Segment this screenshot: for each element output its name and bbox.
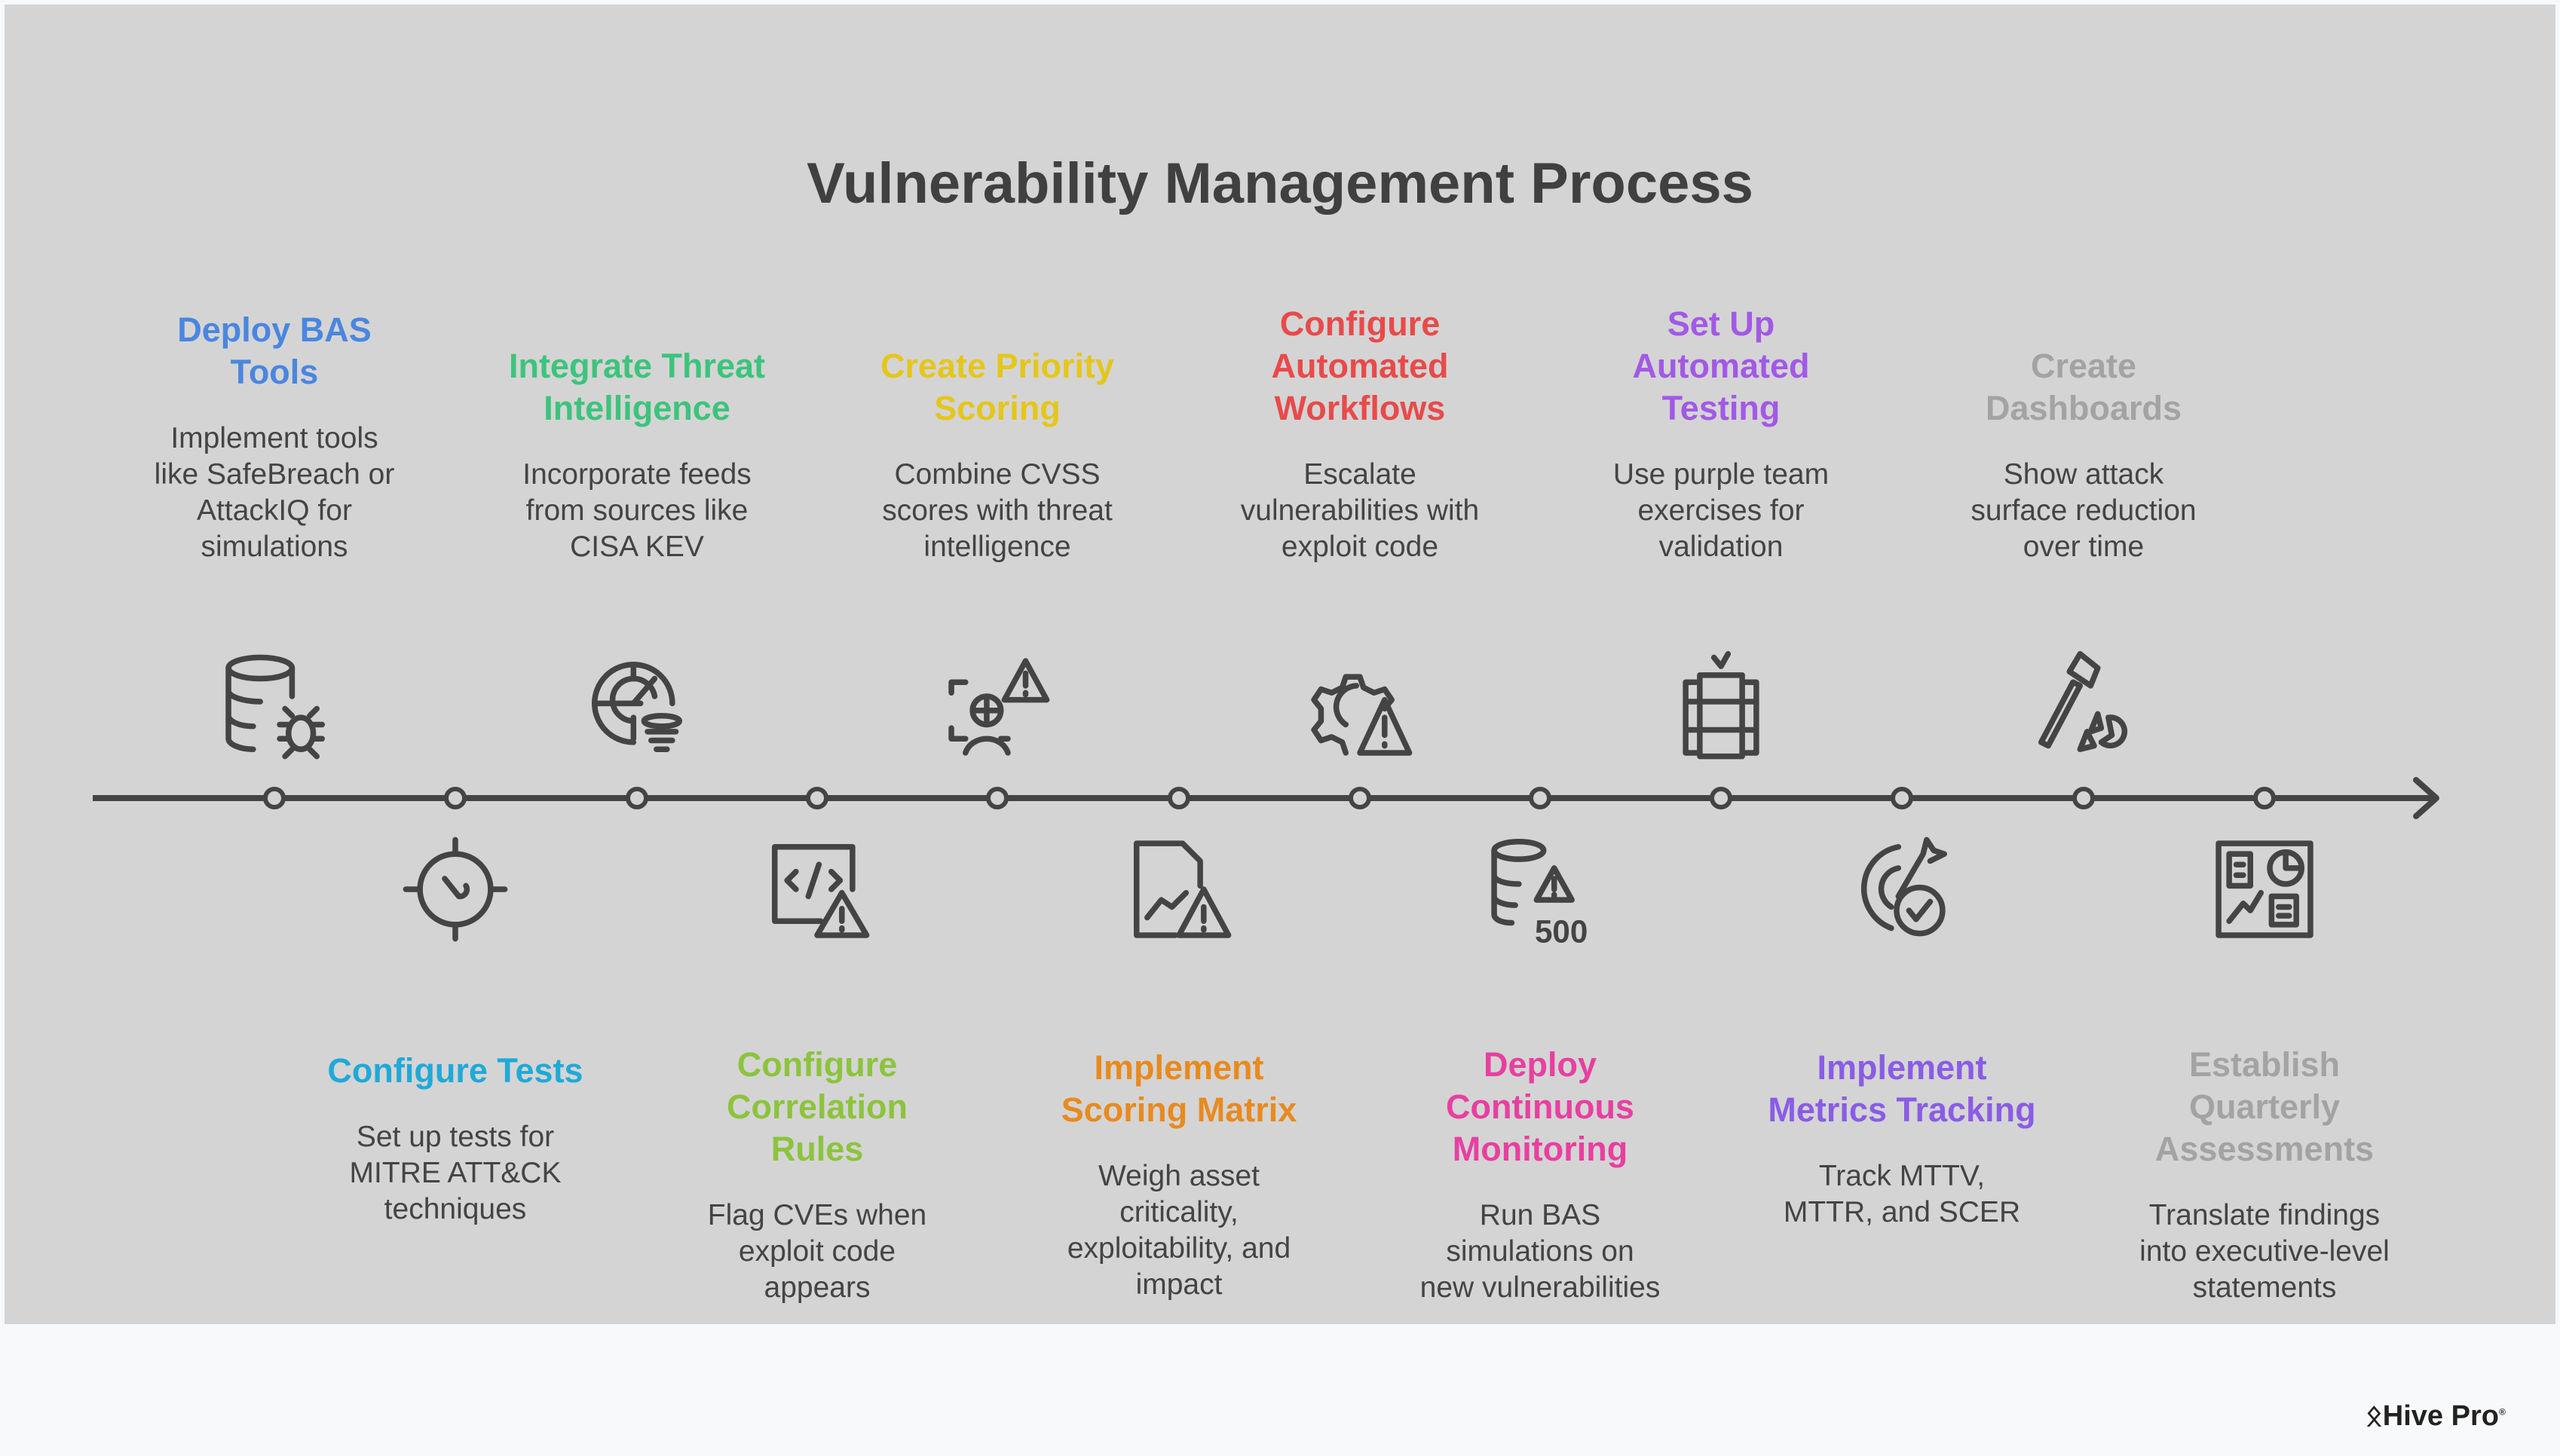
step 5 text <box>880 347 1114 563</box>
step 9 text <box>1613 304 1829 563</box>
step 8 text: Run BAS <box>1480 1199 1600 1231</box>
step 5 text: scores with threat <box>882 494 1113 527</box>
step 2 text: MITRE ATT&CK <box>350 1157 561 1189</box>
step 7 text: Automated <box>1271 347 1449 385</box>
step 6 text: Weigh asset <box>1098 1160 1260 1192</box>
step 4 text: appears <box>764 1271 870 1304</box>
step 11 text: Create <box>2031 347 2136 385</box>
step 3 text: CISA KEV <box>570 531 704 563</box>
step 7 text: Configure <box>1280 304 1440 343</box>
step 3 text: Integrate Threat <box>509 347 765 385</box>
icon: face scan warning <box>948 658 1049 756</box>
icon: dashboard <box>2216 840 2313 938</box>
step 5 text: Combine CVSS <box>894 458 1101 491</box>
step 6 text <box>1061 1048 1297 1301</box>
step 4 text: exploit code <box>739 1235 896 1268</box>
title: Vulnerability Management Process <box>807 151 1753 216</box>
icon: code window warning <box>772 844 870 938</box>
step 9 text: Use purple team <box>1613 458 1829 491</box>
step 5 text: Create Priority <box>880 347 1114 385</box>
step 6 text: Implement <box>1094 1048 1264 1087</box>
step 10 text: Implement <box>1817 1048 1987 1087</box>
step 12 text: Translate findings <box>2149 1199 2380 1231</box>
step 8 text: Continuous <box>1446 1087 1634 1126</box>
step 12 text: Assessments <box>2155 1130 2374 1168</box>
step 7 text: exploit code <box>1282 531 1438 563</box>
icon: chart doc warning <box>1134 840 1232 938</box>
step 5 text: intelligence <box>923 531 1071 563</box>
icon: film check <box>1683 651 1759 760</box>
icon: target check <box>1860 837 1947 936</box>
step 5 text: Scoring <box>934 389 1061 427</box>
step 9 text: validation <box>1659 531 1783 563</box>
step 1 text: simulations <box>201 531 348 563</box>
icon: gear warning <box>1311 674 1413 756</box>
step 8 text: new vulnerabilities <box>1420 1271 1660 1304</box>
step 2 text: Configure Tests <box>327 1051 583 1090</box>
step 7 text: vulnerabilities with <box>1241 494 1479 527</box>
step 6 text: impact <box>1136 1268 1222 1301</box>
step 1 text: Implement tools <box>170 422 378 454</box>
step 1 text: like SafeBreach or <box>155 458 394 491</box>
step 6 text: Scoring Matrix <box>1061 1090 1297 1129</box>
step 4 text: Correlation <box>727 1087 908 1126</box>
logo: Hive Pro: ᛟHive Pro® <box>2366 1400 2506 1432</box>
step 11 text: surface reduction <box>1971 494 2197 527</box>
step 11 text <box>1971 347 2197 563</box>
step 7 text: Escalate <box>1303 458 1416 491</box>
step 12 text: Establish <box>2189 1045 2340 1084</box>
step 3 text <box>509 347 765 563</box>
step 1 text <box>155 310 394 563</box>
step 2 text: Set up tests for <box>357 1121 554 1153</box>
step 12 text: statements <box>2193 1271 2336 1304</box>
step 10 text: MTTR, and SCER <box>1784 1196 2020 1228</box>
step 11 text: Dashboards <box>1986 389 2182 427</box>
step 8 text: simulations on <box>1446 1235 1634 1268</box>
step 10 text: Metrics Tracking <box>1768 1090 2036 1129</box>
step 12 text: into executive-level <box>2139 1235 2390 1268</box>
icon: hammer shapes <box>2038 651 2127 752</box>
step 1 text: Deploy BAS <box>177 310 372 349</box>
step 4 text: Configure <box>737 1045 897 1084</box>
step 8 text: Monitoring <box>1453 1130 1628 1168</box>
step 11 text: Show attack <box>2004 458 2163 491</box>
step 9 text: Set Up <box>1667 304 1775 343</box>
step 9 text: Automated <box>1633 347 1809 385</box>
step 3 text: Incorporate feeds <box>522 458 752 491</box>
step 3 text: from sources like <box>526 494 748 527</box>
step 6 text: criticality, <box>1119 1196 1239 1228</box>
step 11 text: over time <box>2023 531 2144 563</box>
step 12 text: Quarterly <box>2189 1087 2340 1126</box>
step 8 text: Deploy <box>1484 1045 1597 1084</box>
step 4 text: Flag CVEs when <box>708 1199 926 1231</box>
step 9 text: Testing <box>1662 389 1780 427</box>
icon: database warning 500 <box>1491 839 1588 946</box>
step 2 text <box>327 1051 583 1225</box>
step 3 text: Intelligence <box>544 389 730 427</box>
step 9 text: exercises for <box>1637 494 1805 527</box>
step 2 text: techniques <box>384 1193 526 1225</box>
step 1 text: AttackIQ for <box>197 494 352 527</box>
step 4 text <box>708 1045 926 1304</box>
icon: database bug <box>225 654 325 760</box>
step 7 text <box>1241 304 1479 563</box>
icon: crosshair clock <box>403 837 508 942</box>
step 8 text <box>1420 1045 1660 1304</box>
step 10 text: Track MTTV, <box>1819 1160 1985 1192</box>
step 1 text: Tools <box>231 353 318 391</box>
step 12 text <box>2139 1045 2390 1304</box>
step 6 text: exploitability, and <box>1067 1232 1291 1265</box>
step 10 text <box>1768 1048 2036 1228</box>
step 4 text: Rules <box>771 1130 863 1168</box>
icon: radar funnel <box>592 662 682 752</box>
step 7 text: Workflows <box>1275 389 1445 427</box>
